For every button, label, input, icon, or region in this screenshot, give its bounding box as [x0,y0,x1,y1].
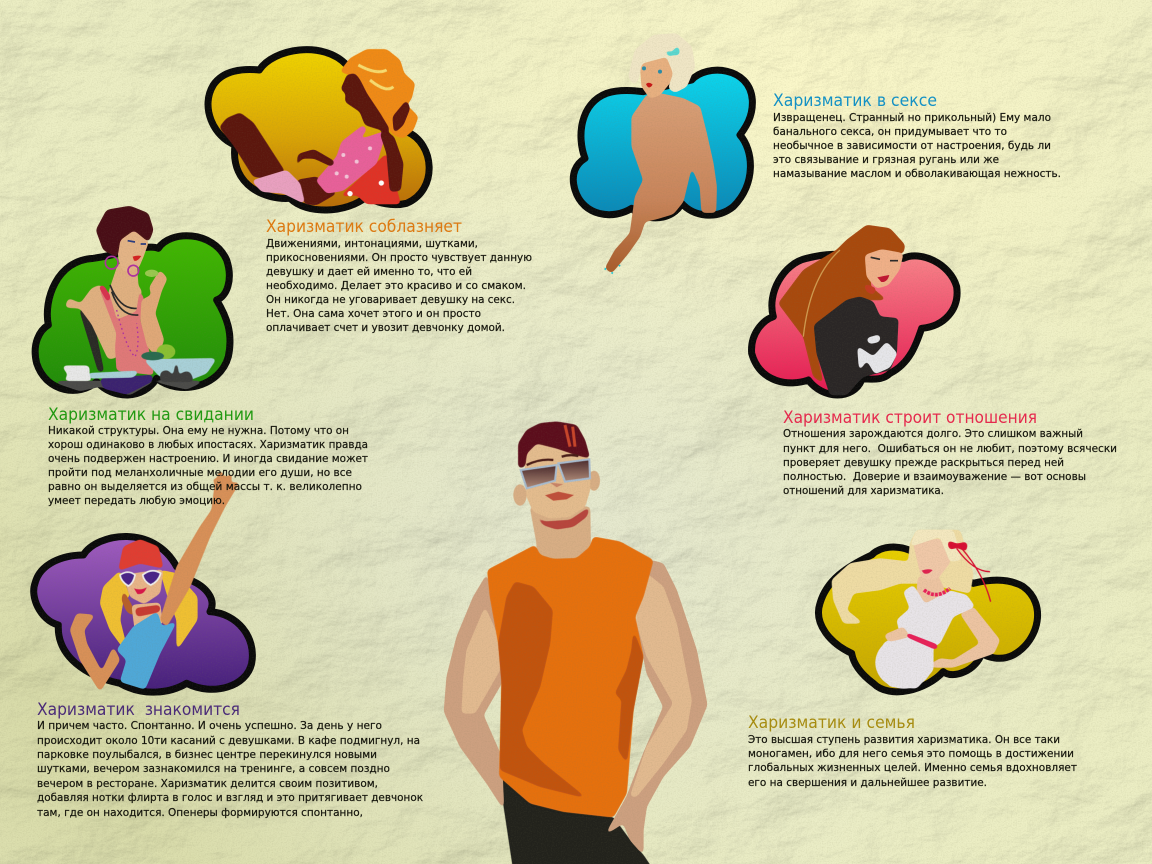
figure: central man in orange shirt [444,422,707,864]
panel: seduces [208,49,532,334]
text block: его на свершения и дальнейшее развитие. [748,776,987,789]
shirt [487,537,653,817]
text block [773,111,1061,180]
text block: хорош одинаково в любых ипостасях. Харизматик правда [48,438,368,451]
neck [530,507,591,560]
text block: Он никогда не уговаривает девушку на секс. [266,293,515,306]
text block: намазывание маслом и обволакивающая нежность. [773,167,1061,180]
text block: пройти под меланхоличные мелодии его души, но все [48,466,352,479]
text block: И причем часто. Спонтанно. И очень успешно. За день у него [37,719,382,732]
text block: необычное в зависимости от настроения, будь ли [773,139,1051,152]
text block: проверяет девушку прежде раскрыться перед ней [783,456,1064,469]
text block: пункт для него. Ошибаться он не любит, поэтому всячески [783,442,1117,455]
figure: woman with long hair [778,225,905,395]
figure: woman silhouette [219,49,418,205]
text block [266,237,532,334]
text block: равно он выделяется из общей массы т. к. великолепно [48,480,362,493]
text block: банального секса, он придумывает что то [773,125,1007,138]
text block: парковке поулыбался, в бизнес центре перекинулся новыми [37,748,377,761]
text block [748,733,1078,789]
panel: family [748,530,1078,789]
text block [783,427,1117,497]
text block [37,719,423,819]
text block: необходимо. Делает это красиво и со смаком. [266,279,526,292]
text block: Движениями, интонациями, шутками, [266,237,478,250]
text block: глобальных жизненных целей. Именно семья вдохновляет [748,761,1078,774]
cloud: green [35,236,230,395]
text block: Отношения зарождаются долго. Это слишком важный [783,427,1083,440]
text block [48,424,369,507]
figure: woman at table [50,206,217,395]
text block: происходит около 10ти касаний с девушками. В кафе подмигнул, на [37,734,420,747]
arm: left [444,573,504,810]
arm: right [605,560,707,855]
panel: on a date [35,206,369,507]
text block: очень подвержен настроению. И иногда свидание может [48,452,369,465]
text block: девушку и дает ей именно то, что ей [266,265,472,278]
panel: in bed [573,33,1061,274]
text block: моногамен, ибо для него семья это помощь в достижении [748,747,1074,760]
text block: Извращенец. Странный но прикольный) Ему мало [773,111,1051,124]
text block: Никакой структуры. Она ему не нужна. Потому что он [48,424,349,437]
text block: вечером в ресторане. Харизматик делится своим позитивом, [37,777,378,790]
cloud: yellow [819,547,1038,692]
cloud: blue [573,70,752,218]
figure: woman from behind [605,33,717,274]
cloud: yellow [208,50,429,210]
text block: добавляя нотки флирта в голос и взгляд и это притягивает девчонок [37,791,423,804]
head [513,422,600,529]
text block: отношений для харизматика. [783,484,944,497]
text block: Нет. Она сама хочет этого и он просто [266,307,481,320]
text block: полностью. Доверие и взаимоуважение — вот основы [783,470,1086,483]
panel: relationships [752,225,1117,497]
text block: это связывание и грязная ругань или же [773,153,999,166]
text block: оплачивает счет и увозит девчонку домой. [266,321,505,334]
text block: прикосновениями. Он просто чувствует данную [266,251,532,264]
heading: Харизматик соблазняет [266,217,462,237]
text block: умеет передать любую эмоцию. [48,494,225,507]
heading: Харизматик и семья [748,713,915,733]
heading: Харизматик в сексе [773,91,937,111]
figure: woman waving [70,468,240,692]
panel: meets girls [34,468,423,819]
heading: Харизматик знакомится [37,700,240,720]
heading: Харизматик на свидании [48,405,254,425]
figure: pregnant woman [832,530,1000,689]
cloud: pink [752,254,957,395]
text block: Это высшая ступень развития харизматика. Он все таки [748,733,1060,746]
text block: там, где он находится. Опенеры формируются спонтанно, [37,806,363,819]
trousers [499,777,653,864]
cloud: purple [34,536,252,692]
heading: Харизматик строит отношения [783,408,1037,428]
text block: шутками, вечером зазнакомился на тренинге, а совсем поздно [37,762,390,775]
